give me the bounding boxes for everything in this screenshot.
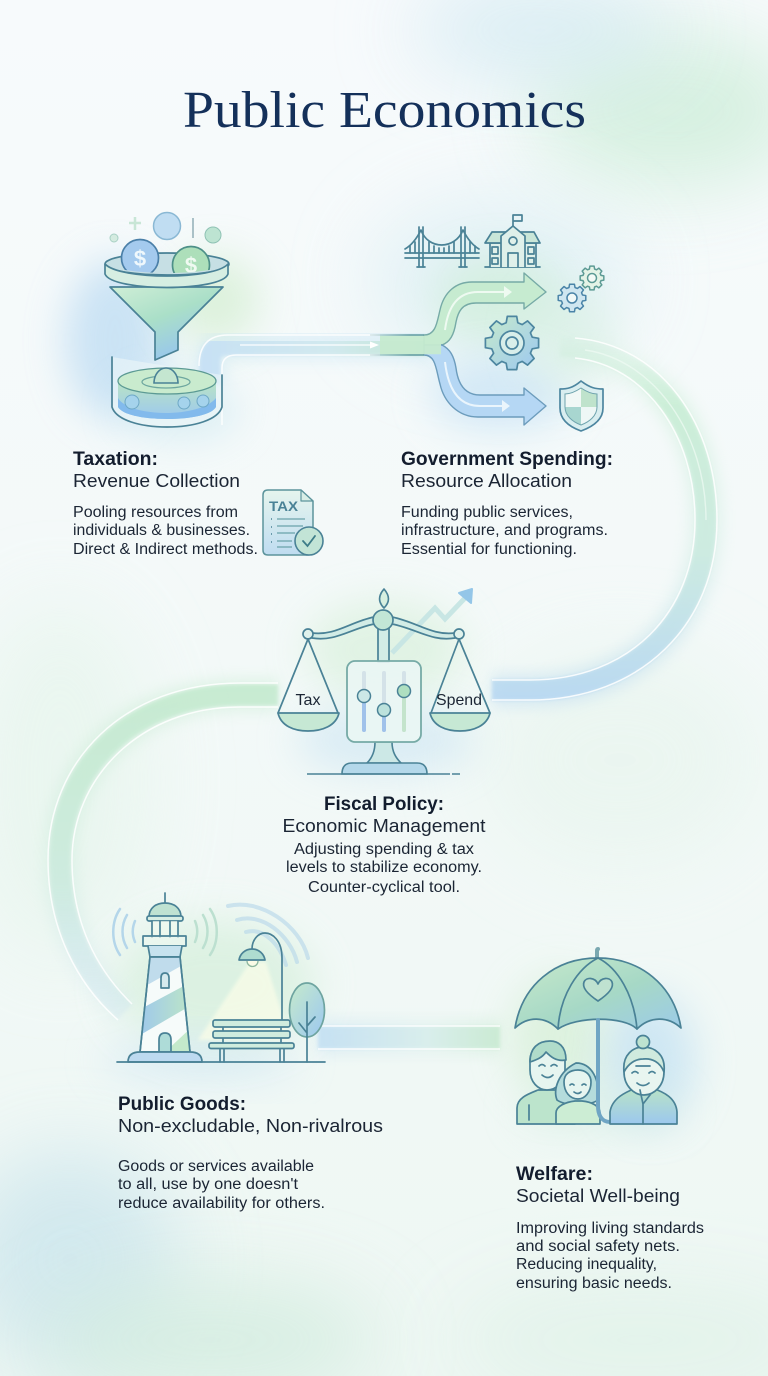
text block: public goods: Public Goods:: [118, 1094, 246, 1115]
text block: fiscal policy: Counter-cyclical tool.: [308, 879, 460, 896]
icon: bench: [209, 1020, 294, 1062]
text block: government spending: Essential for functioning.: [401, 541, 577, 558]
text block: taxation: individuals & businesses.: [73, 522, 250, 539]
text block: fiscal policy: levels to stabilize economy.: [286, 859, 482, 876]
text block: welfare: Welfare:: [516, 1164, 593, 1185]
flow ribbon: spending arc to fiscal policy: [492, 338, 717, 700]
text block: taxation: Taxation:: [73, 449, 158, 470]
text block: taxation: Revenue Collection: [73, 470, 240, 491]
icon: father: [517, 1041, 575, 1124]
text block: welfare: [516, 1164, 704, 1292]
icon: collection basin: [112, 357, 222, 427]
text block: welfare: Societal Well-being: [516, 1185, 680, 1206]
icon: tax document with check: [263, 490, 323, 555]
text block: welfare: and social safety nets.: [516, 1238, 680, 1255]
text block: public goods: reduce availability for others.: [118, 1195, 325, 1212]
icon: funnel body: [105, 264, 228, 360]
icon: floating coins and sparkles: [110, 212, 221, 243]
text block: taxation: Direct & Indirect methods.: [73, 541, 258, 558]
icon: funnel rim back and coins: [104, 238, 230, 276]
text block: fiscal policy: Economic Management: [282, 815, 486, 836]
text block: fiscal policy: Fiscal Policy:: [324, 794, 444, 815]
text block: taxation: [73, 449, 258, 558]
panel: taxation funnel: [105, 212, 229, 427]
icon: tax document with check: TAX: [269, 498, 299, 514]
text block: government spending: Resource Allocation: [401, 470, 572, 491]
icon: bridge: [405, 227, 479, 267]
icon: funnel rim back and coins: $: [185, 253, 197, 278]
icon: grandmother: [610, 1036, 677, 1124]
icon: umbrella: [515, 949, 681, 1029]
text block: public goods: [118, 1094, 383, 1212]
text block: public goods: to all, use by one doesn't: [118, 1176, 299, 1193]
arrow: upward branch: [424, 273, 546, 345]
icon: shield: [560, 381, 603, 431]
label: tax pan: Tax: [296, 692, 320, 709]
text block: welfare: Reducing inequality,: [516, 1256, 657, 1273]
ground line: [117, 1061, 325, 1063]
icon: rising arrow: [392, 598, 465, 653]
text block: welfare: Improving living standards: [516, 1220, 704, 1237]
icon: funnel rim back and coins: $: [134, 246, 146, 271]
label: spend pan: Spend: [436, 692, 482, 709]
text block: fiscal policy: Adjusting spending & tax: [294, 841, 474, 858]
panel: welfare umbrella and family: [515, 949, 681, 1124]
icon: arrow head: [459, 589, 472, 603]
flow ribbon: public goods to welfare: [318, 1019, 500, 1055]
icon: child: [556, 1063, 600, 1124]
icon: small gears: [558, 266, 604, 312]
text block: welfare: ensuring basic needs.: [516, 1275, 672, 1292]
icon: lighthouse: [128, 893, 202, 1062]
icon: umbrella handle: [598, 1020, 624, 1122]
text block: fiscal policy: [282, 794, 486, 896]
panel: government spending flow arrows: [199, 215, 604, 431]
soft glows behind illustrations: [65, 255, 695, 1132]
text block: public goods: Non-excludable, Non-rivalrous: [118, 1115, 383, 1136]
icon: large gear: [485, 316, 539, 370]
flow ribbon: fiscal policy arc to public goods: [48, 683, 278, 1020]
text block: taxation: Pooling resources from: [73, 504, 238, 521]
icon: signal waves: [113, 905, 308, 965]
text block: government spending: [401, 449, 613, 558]
icon: balance scale: [278, 589, 490, 731]
icon: street lamp and light cone: [198, 933, 290, 1040]
icon: tree: [290, 983, 324, 1062]
icon: school building: [485, 215, 540, 267]
panel: fiscal policy scale: [278, 589, 490, 774]
text block: government spending: Funding public services,: [401, 504, 573, 521]
text block: government spending: infrastructure, and programs.: [401, 522, 608, 539]
title: Public Economics: [183, 82, 586, 139]
icon: control panel sliders: [307, 661, 460, 774]
arrow: main channel from taxation: [199, 335, 432, 425]
text block: government spending: Government Spending:: [401, 449, 613, 470]
arrow: downward branch: [370, 335, 546, 425]
panel: public goods scene: [113, 893, 325, 1062]
text block: public goods: Goods or services available: [118, 1158, 314, 1175]
